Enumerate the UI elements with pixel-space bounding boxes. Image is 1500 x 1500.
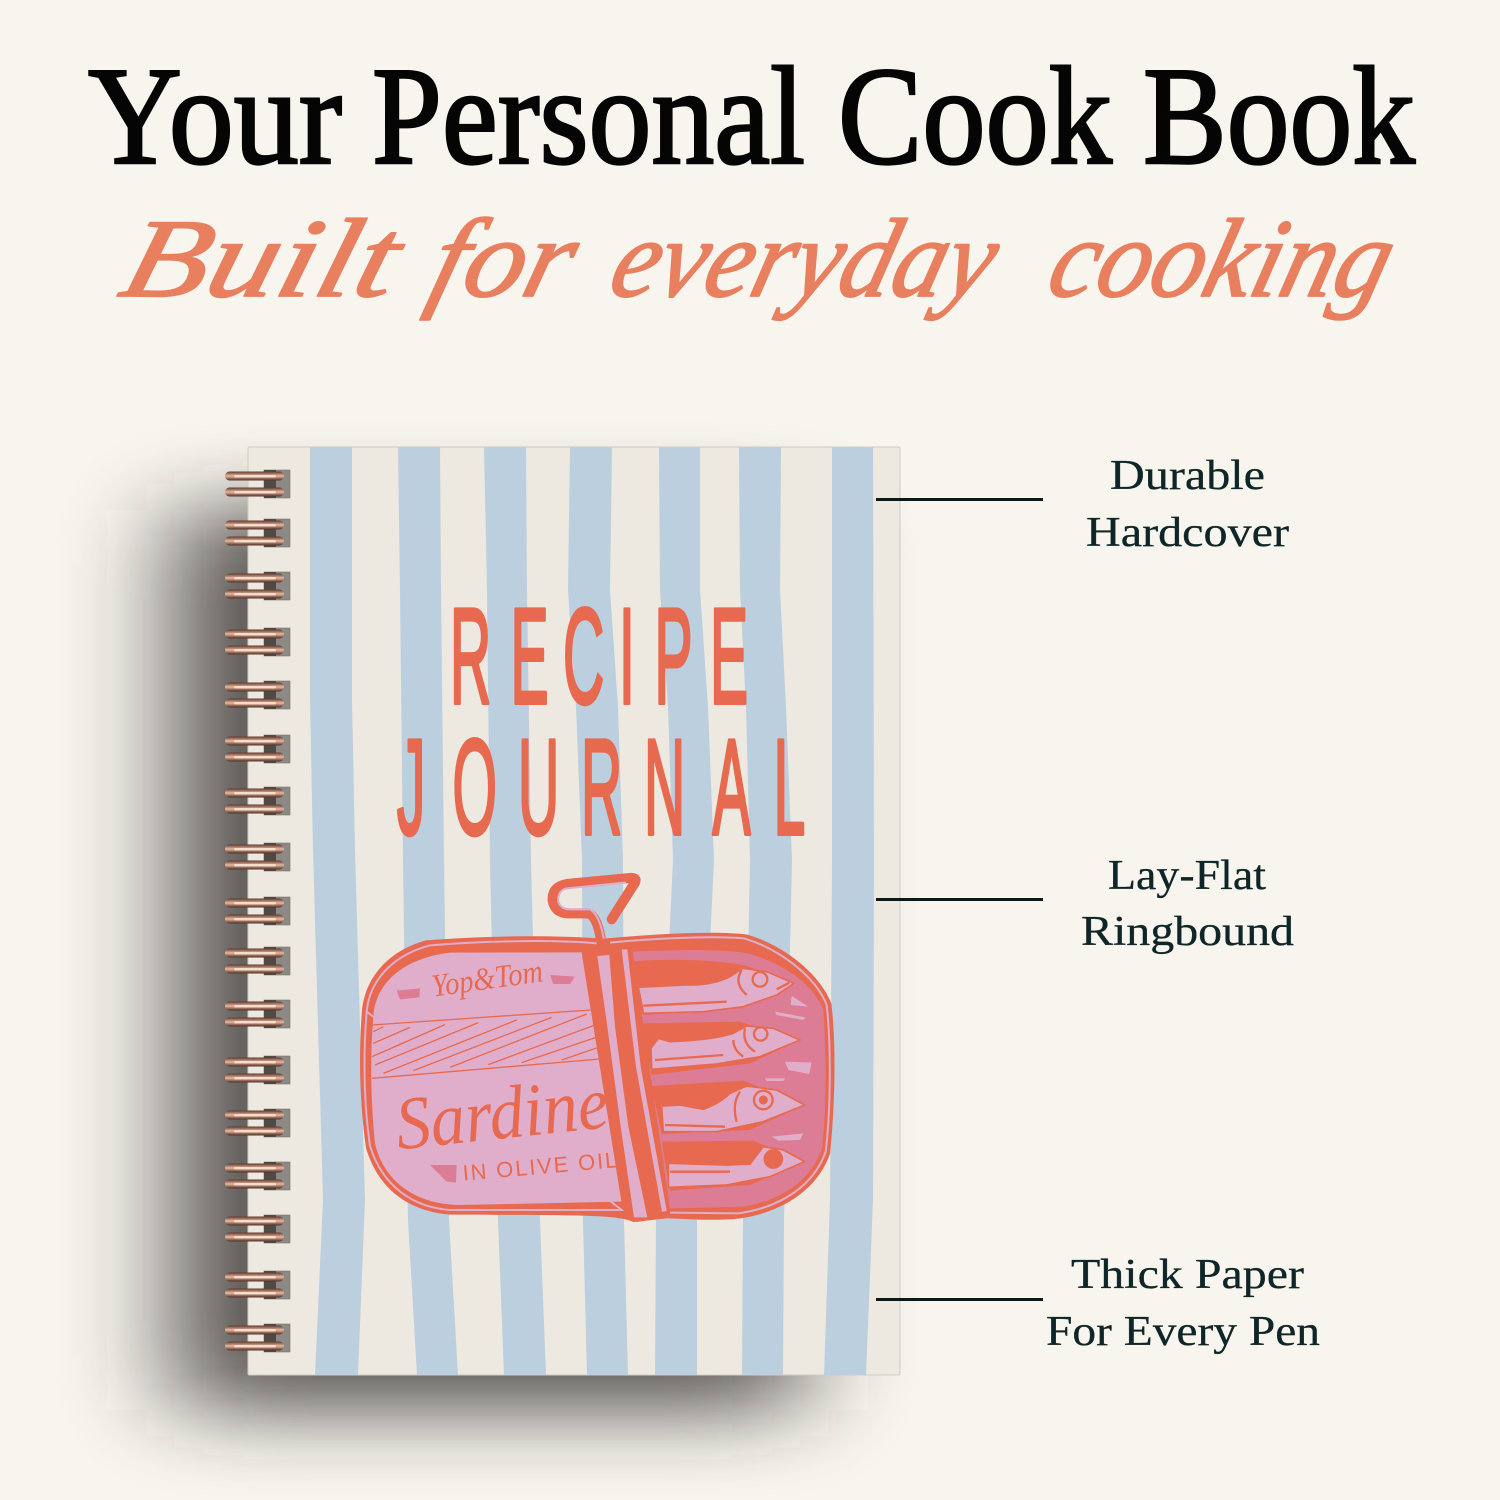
callout text: For Every Pen (1046, 1309, 1320, 1355)
subtitle: for (418, 196, 593, 321)
oil highlights (765, 996, 812, 1141)
leader line (876, 1298, 1043, 1301)
callout text: Hardcover (1086, 510, 1289, 556)
can interior (633, 950, 826, 1208)
sardine 4 (668, 1147, 805, 1187)
subtitle: cooking (1037, 196, 1409, 321)
subtitle: Built (109, 196, 418, 321)
callout: durable hardcover (876, 453, 1289, 556)
can rim highlight (364, 937, 830, 1213)
callout: lay-flat ringbound (876, 853, 1294, 955)
title: Cook (838, 39, 1112, 194)
sardines (638, 968, 805, 1187)
label script: yop and tom: Yop&Tom (429, 952, 545, 1004)
subtitle: everyday (599, 196, 1013, 321)
callout text: Durable (1110, 453, 1265, 499)
fish shadows (629, 960, 804, 1191)
callout text: Lay-Flat (1108, 853, 1266, 899)
leader line (876, 498, 1043, 501)
label text: in olive oil: IN OLIVE OIL (462, 1147, 618, 1186)
title: Book (1143, 39, 1415, 194)
label stripe hatch (372, 1010, 600, 1078)
band highlights (597, 949, 667, 1217)
callout text: Thick Paper (1071, 1252, 1304, 1298)
word: journal: JOURNAL (397, 713, 805, 864)
leader line (876, 898, 1043, 901)
sardine can illustration (360, 878, 835, 1222)
callout: thick paper for every pen (876, 1252, 1320, 1355)
notebook shadow (175, 510, 800, 1410)
label pink marks (397, 975, 575, 1183)
notebook (175, 447, 900, 1410)
blue stripes (310, 447, 874, 1375)
recipe journal heading (397, 582, 805, 864)
can body (360, 933, 835, 1222)
sardine 2 (651, 1026, 800, 1069)
notebook cover (248, 447, 900, 1375)
can key handle (553, 878, 636, 946)
word: recipe: RECIPE (450, 582, 748, 733)
title: Your (88, 39, 342, 194)
title: Personal (372, 39, 805, 194)
sardine 3 (662, 1086, 805, 1132)
sardine 1 (638, 968, 794, 1013)
label script: sardine: Sardine (391, 1061, 612, 1166)
callout text: Ringbound (1081, 909, 1294, 955)
spiral binding (225, 470, 290, 1352)
center band (582, 947, 668, 1222)
sardine eyes and gills (643, 970, 789, 1172)
left label panel (371, 952, 622, 1205)
